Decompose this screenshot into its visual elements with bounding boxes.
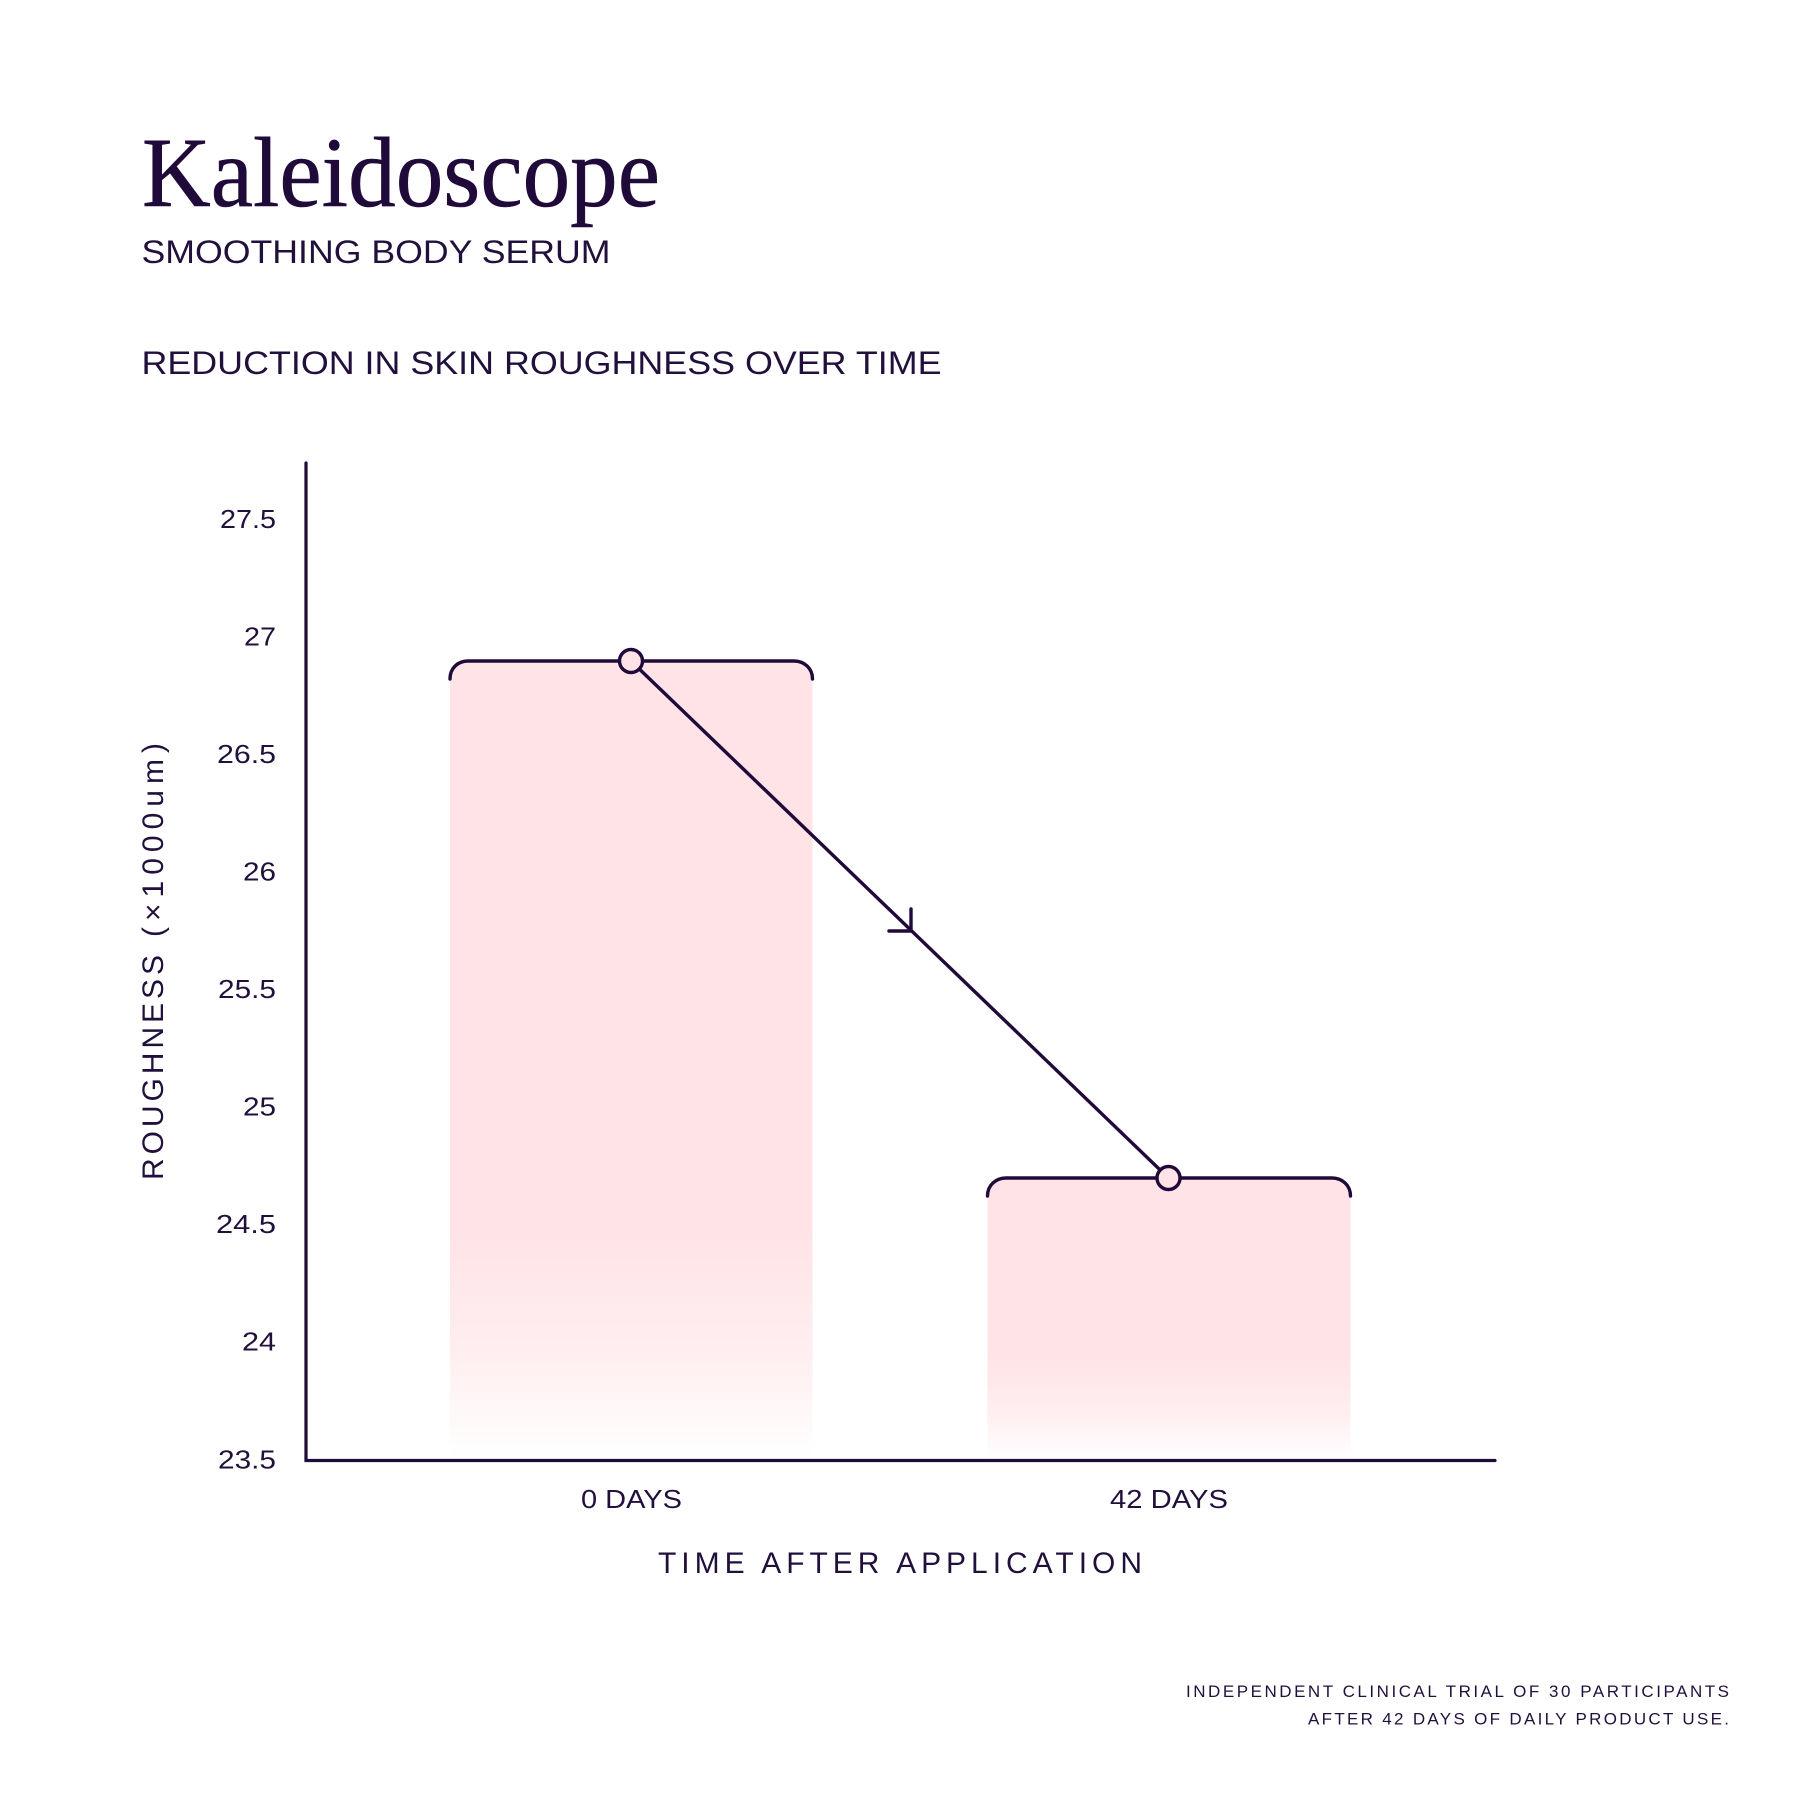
y axis tick labels: 24 xyxy=(242,1326,276,1356)
y axis tick labels: 25 xyxy=(243,1092,276,1122)
y axis tick labels: 23.5 xyxy=(218,1444,276,1474)
y axis title xyxy=(137,743,170,1180)
footnote: AFTER 42 DAYS OF DAILY PRODUCT USE. xyxy=(1308,1710,1729,1728)
data point: 42 days xyxy=(1157,1166,1180,1190)
y axis tick labels xyxy=(216,504,276,1474)
bar chart xyxy=(137,463,1495,1580)
y axis title: ROUGHNESS xyxy=(137,955,170,1180)
y axis title: (×1000um) xyxy=(137,743,170,937)
bar: 0 days xyxy=(450,661,812,1458)
footnote: INDEPENDENT CLINICAL TRIAL OF 30 PARTICIPANTS xyxy=(1186,1682,1729,1701)
x axis title: TIME AFTER APPLICATION xyxy=(658,1547,1142,1580)
y axis tick labels: 24.5 xyxy=(216,1209,276,1239)
subtitle: SMOOTHING BODY SERUM xyxy=(142,234,610,270)
trend line xyxy=(631,661,1168,1178)
x axis label: 42 days: 42 DAYS xyxy=(1110,1484,1228,1514)
x axis label: 0 days: 0 DAYS xyxy=(581,1484,682,1514)
chart heading: REDUCTION IN SKIN ROUGHNESS OVER TIME xyxy=(142,345,942,381)
arrow: direction marker xyxy=(889,909,911,931)
y axis tick labels: 27.5 xyxy=(220,504,276,534)
y axis tick labels: 25.5 xyxy=(218,974,276,1004)
footnote xyxy=(1186,1682,1729,1728)
y axis tick labels: 26.5 xyxy=(217,739,276,769)
y axis tick labels: 27 xyxy=(244,622,276,652)
bar: 42 days xyxy=(988,1178,1350,1458)
title: Kaleidoscope xyxy=(142,117,660,228)
axes xyxy=(306,463,1495,1460)
y axis tick labels: 26 xyxy=(243,856,276,886)
data point: 0 days xyxy=(620,650,642,672)
